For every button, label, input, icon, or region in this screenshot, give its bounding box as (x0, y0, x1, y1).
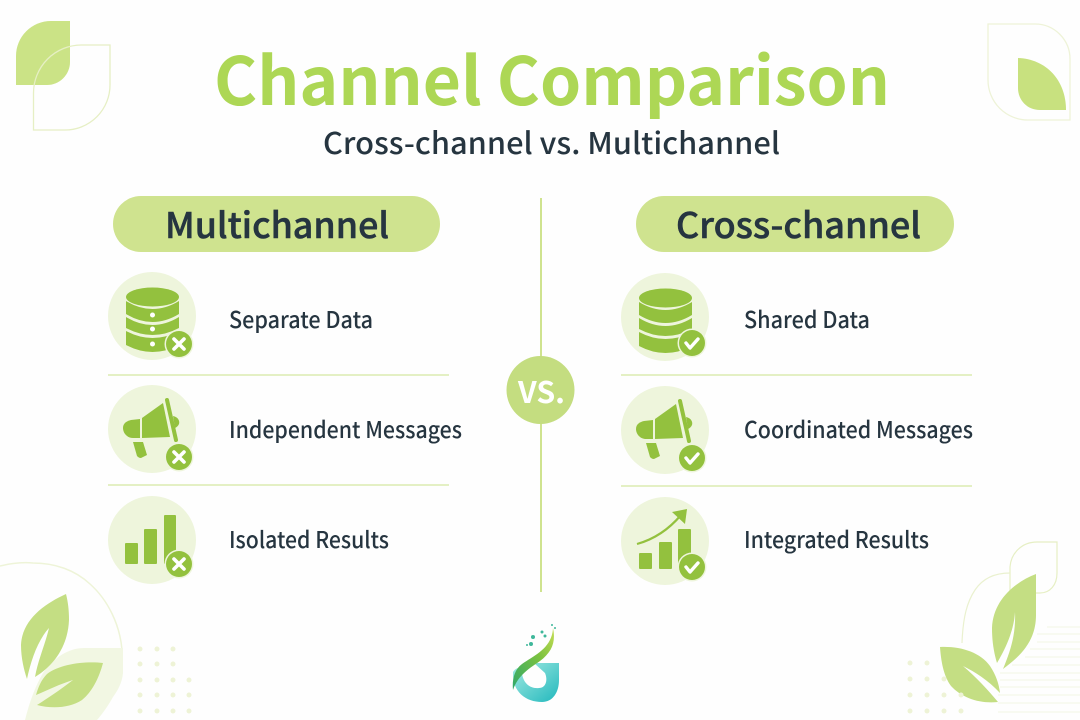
row: integrated results: Integrated Results (744, 521, 929, 555)
panel: multichannel (108, 196, 462, 584)
heading pill: multichannel (113, 196, 440, 252)
vs badge: VS. (517, 368, 565, 412)
decoration: bottom-left leaves (0, 563, 123, 720)
title: Channel Comparison (214, 29, 890, 125)
heading pill: cross-channel: Cross-channel (676, 198, 921, 249)
heading pill: multichannel: Multichannel (165, 198, 389, 249)
row: coordinated messages: Coordinated Messages (744, 411, 973, 445)
row: integrated results (621, 497, 929, 585)
row: isolated results: Isolated Results (229, 521, 389, 555)
row: separate data: Separate Data (229, 301, 373, 335)
row: coordinated messages (621, 386, 973, 474)
row: shared data (621, 273, 870, 361)
decoration: bottom-right leaves (940, 542, 1080, 712)
center divider (540, 198, 542, 592)
row: separate data (108, 272, 373, 360)
decoration: bottom-left dots (138, 646, 192, 714)
decoration: top-right leaves (988, 24, 1070, 120)
decoration: bottom-right dots (908, 660, 964, 714)
decoration: top-left leaves (16, 21, 110, 130)
row: isolated results (108, 496, 389, 584)
vs badge (506, 356, 574, 424)
row: shared data: Shared Data (744, 301, 870, 335)
row: independent messages: Independent Messages (229, 411, 462, 445)
logo (513, 624, 559, 702)
heading pill: cross-channel (636, 196, 954, 252)
subtitle: Cross-channel vs. Multichannel (323, 119, 780, 163)
row: independent messages (108, 385, 462, 473)
panel: cross-channel (621, 196, 973, 585)
